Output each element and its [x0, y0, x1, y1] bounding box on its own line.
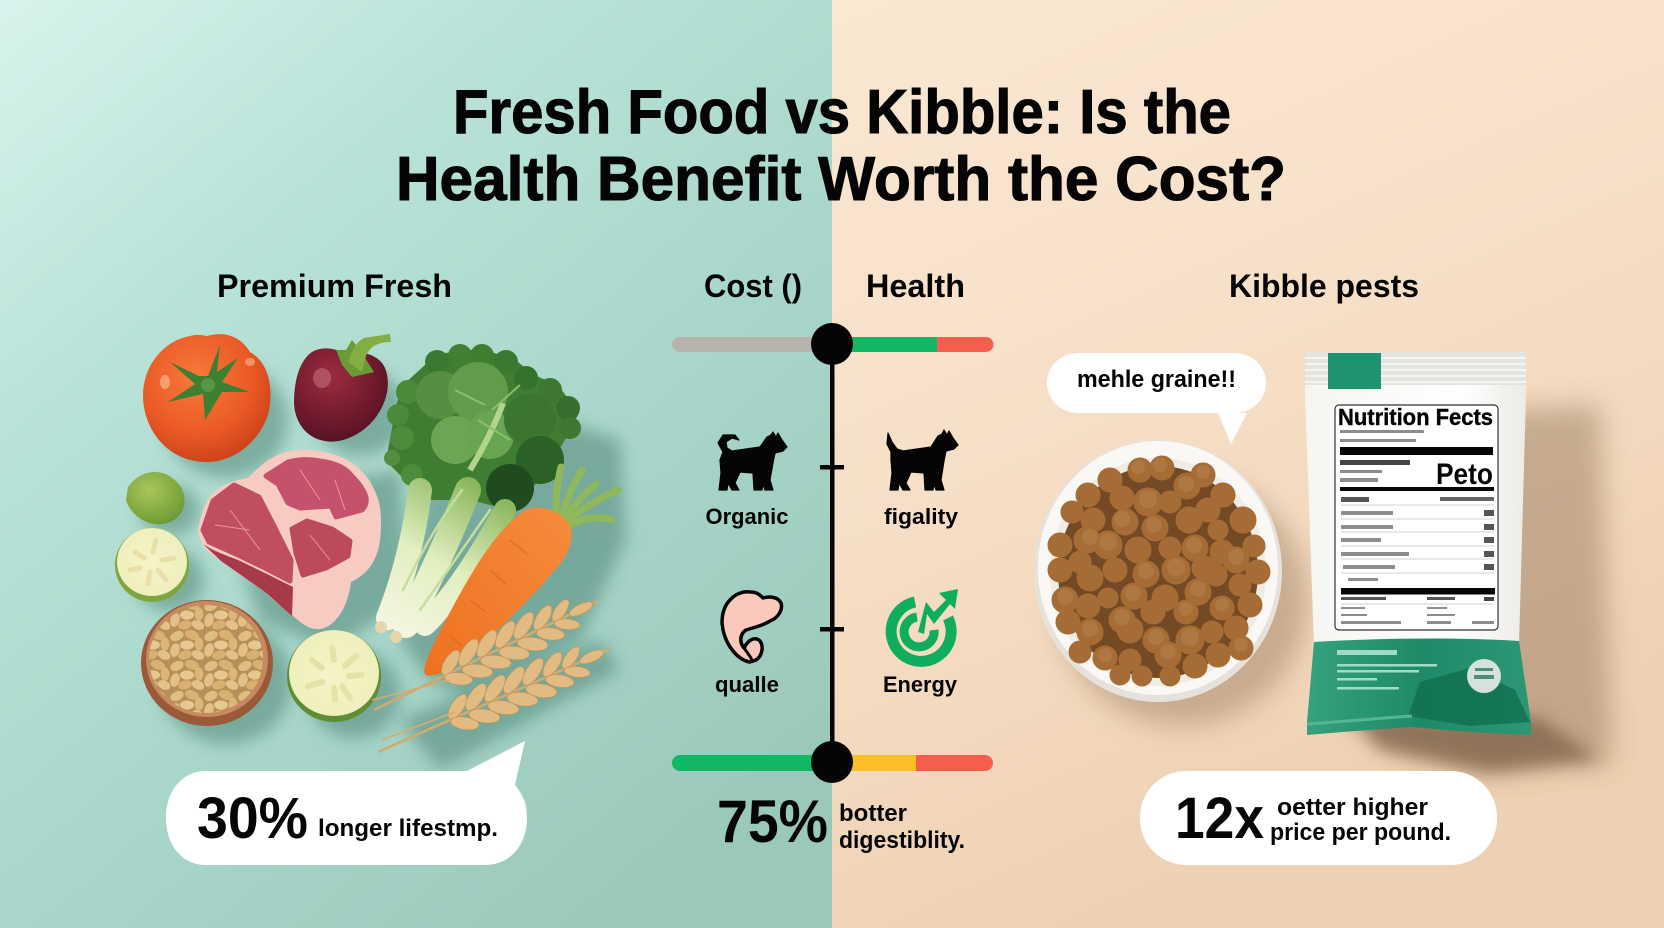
- heading: Cost: Cost (): [704, 268, 802, 304]
- stat: 75% better digestibility: botter: [839, 800, 907, 827]
- tomato: [143, 334, 270, 462]
- bag shadow: [1345, 405, 1612, 775]
- background: fresh side: [0, 0, 832, 928]
- top gauge: [672, 323, 994, 365]
- bell pepper: [294, 334, 391, 442]
- label: Energy: Energy: [883, 672, 957, 697]
- title: Fresh Food vs Kibble: Is the: [453, 78, 1231, 147]
- heading: Health: Health: [866, 268, 965, 304]
- heading: Kibble pests: Kibble pests: [1229, 268, 1419, 304]
- kibble bag: [1305, 352, 1531, 735]
- white bowl: [1034, 440, 1282, 702]
- wheat stalks: [363, 579, 620, 774]
- nutrition label: [1335, 404, 1498, 630]
- kibble pieces: [1049, 457, 1269, 685]
- green base small text: [1337, 650, 1437, 690]
- bag green base: [1307, 638, 1531, 735]
- callout: 30% longer lifespan: 30%: [197, 786, 308, 851]
- cucumber slice bottom: [287, 630, 381, 722]
- bottom gauge: [672, 741, 993, 783]
- raw meat: [198, 450, 381, 629]
- carrot: [424, 467, 618, 676]
- stat: 75% better digestibility: [717, 788, 965, 855]
- food shadows: [136, 362, 626, 770]
- speech bubble: mehle graine!!: [1077, 366, 1236, 393]
- callout: 12x higher price per pound: oetter higher: [1277, 794, 1428, 821]
- label: figality: figality: [884, 504, 958, 529]
- stat: 75% better digestibility: digestiblity.: [839, 827, 965, 854]
- label: Organic: Organic: [706, 504, 788, 529]
- tick lower: [820, 627, 844, 632]
- nutrition label: Nutrition Fects: [1338, 404, 1493, 430]
- callout: 12x higher price per pound: price per pound.: [1270, 819, 1451, 846]
- title: [396, 78, 1286, 214]
- speech bubble: [1047, 353, 1266, 444]
- callout: 12x higher price per pound: [1140, 771, 1497, 865]
- icon: dog left: [718, 432, 787, 490]
- callout: 30% longer lifespan: [166, 741, 527, 865]
- illustration: fresh ingredients: [115, 334, 626, 774]
- tick upper: [820, 465, 844, 470]
- background: kibble side: [832, 0, 1664, 928]
- stat: 75% better digestibility: 75%: [717, 788, 828, 855]
- illustration: kibble bowl and bag: [1034, 352, 1612, 775]
- heading: Premium Fresh: Premium Fresh: [217, 268, 452, 304]
- leaf mass: [384, 344, 581, 512]
- icon: stomach: [722, 592, 781, 662]
- nutrition label: Peto: [1436, 458, 1493, 491]
- callout: 30% longer lifespan: longer lifestmp.: [318, 815, 498, 842]
- icon: dog right: [887, 430, 958, 490]
- callout: 12x higher price per pound: 12x: [1175, 786, 1264, 851]
- stalks: [388, 490, 505, 625]
- leafy greens: [375, 344, 581, 643]
- bowl shadow: [1056, 474, 1308, 726]
- center divider line: [830, 344, 834, 764]
- icon: energy target: [891, 589, 958, 661]
- title: Health Benefit Worth the Cost?: [396, 145, 1286, 214]
- bowl of grains: [141, 600, 273, 726]
- label: qualle: qualle: [715, 672, 779, 697]
- lime: [126, 472, 185, 524]
- cucumber slice left: [115, 528, 189, 602]
